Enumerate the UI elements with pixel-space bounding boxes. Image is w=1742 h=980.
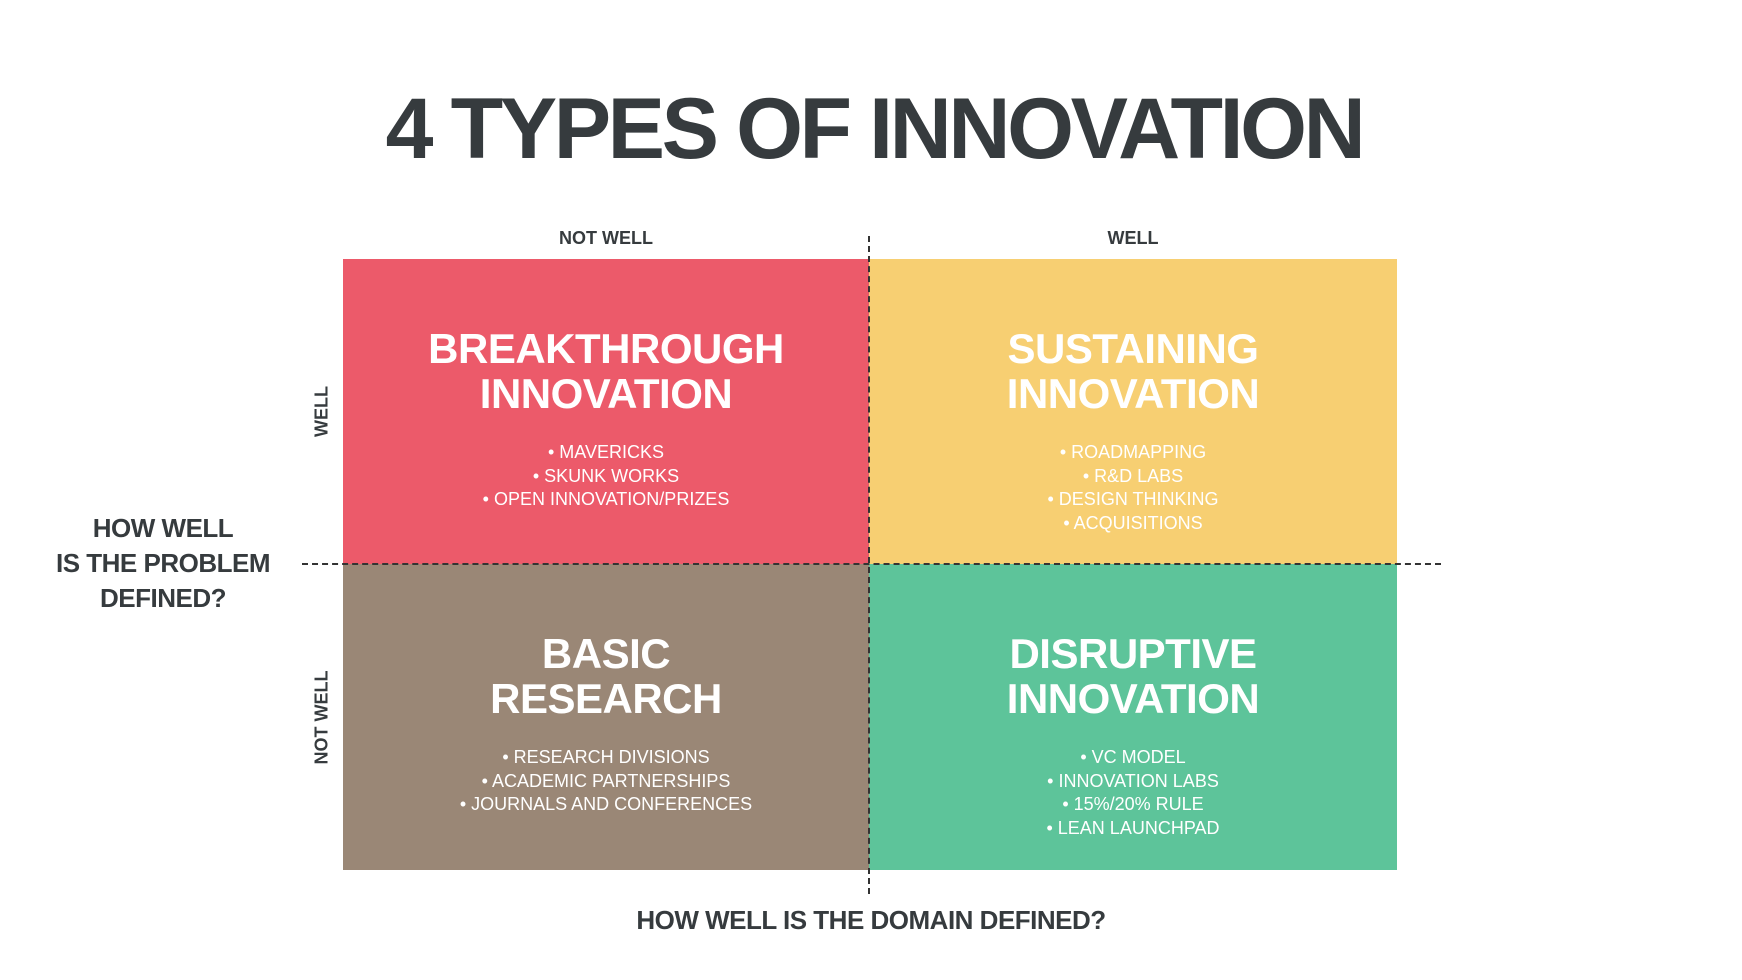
quadrant: breakthrough: • MAVERICKS (548, 442, 664, 462)
quadrant: sustaining: • DESIGN THINKING (1048, 489, 1218, 509)
row label: not well: NOT WELL (312, 671, 332, 764)
column label: not well: NOT WELL (559, 228, 653, 248)
quadrant: sustaining: • R&D LABS (1083, 466, 1183, 486)
quadrant: breakthrough: INNOVATION (480, 370, 732, 417)
y-axis question: DEFINED? (100, 583, 226, 613)
quadrant: breakthrough (343, 259, 869, 564)
quadrant: disruptive: • 15%/20% RULE (1062, 794, 1204, 814)
row label: well: WELL (312, 386, 332, 437)
quadrant: disruptive (869, 564, 1397, 870)
quadrant: sustaining: • ACQUISITIONS (1063, 512, 1203, 532)
y-axis question (56, 513, 270, 613)
quadrant: sustaining: • ROADMAPPING (1060, 442, 1206, 462)
quadrant: basic research: • ACADEMIC PARTNERSHIPS (482, 770, 730, 790)
horizontal dotted axis (302, 563, 1441, 565)
quadrant: sustaining: SUSTAINING (1008, 325, 1258, 372)
quadrant: sustaining (869, 259, 1397, 564)
quadrant: disruptive: • LEAN LAUNCHPAD (1046, 818, 1220, 838)
quadrant: sustaining: INNOVATION (1007, 370, 1259, 417)
quadrant: disruptive: INNOVATION (1007, 675, 1259, 722)
quadrant: basic research: • JOURNALS AND CONFERENCES (460, 794, 752, 814)
title: 4 TYPES OF INNOVATION (386, 81, 1362, 177)
column label: well: WELL (1108, 228, 1158, 248)
quadrant: disruptive: • INNOVATION LABS (1047, 770, 1219, 790)
quadrant: breakthrough: BREAKTHROUGH (428, 325, 784, 372)
quadrant: basic research: RESEARCH (490, 675, 722, 722)
quadrant: disruptive: • VC MODEL (1080, 747, 1186, 767)
quadrant: basic research: • RESEARCH DIVISIONS (502, 747, 710, 767)
y-axis question: HOW WELL (93, 513, 233, 543)
y-axis question: IS THE PROBLEM (56, 548, 270, 578)
quadrant: basic research: BASIC (542, 630, 670, 677)
quadrant: basic research (343, 564, 869, 870)
vertical dotted axis (868, 236, 870, 894)
quadrant: disruptive: DISRUPTIVE (1009, 630, 1257, 677)
x-axis question: HOW WELL IS THE DOMAIN DEFINED? (636, 905, 1106, 935)
quadrant: breakthrough: • OPEN INNOVATION/PRIZES (483, 489, 729, 509)
quadrant: breakthrough: • SKUNK WORKS (533, 466, 679, 486)
